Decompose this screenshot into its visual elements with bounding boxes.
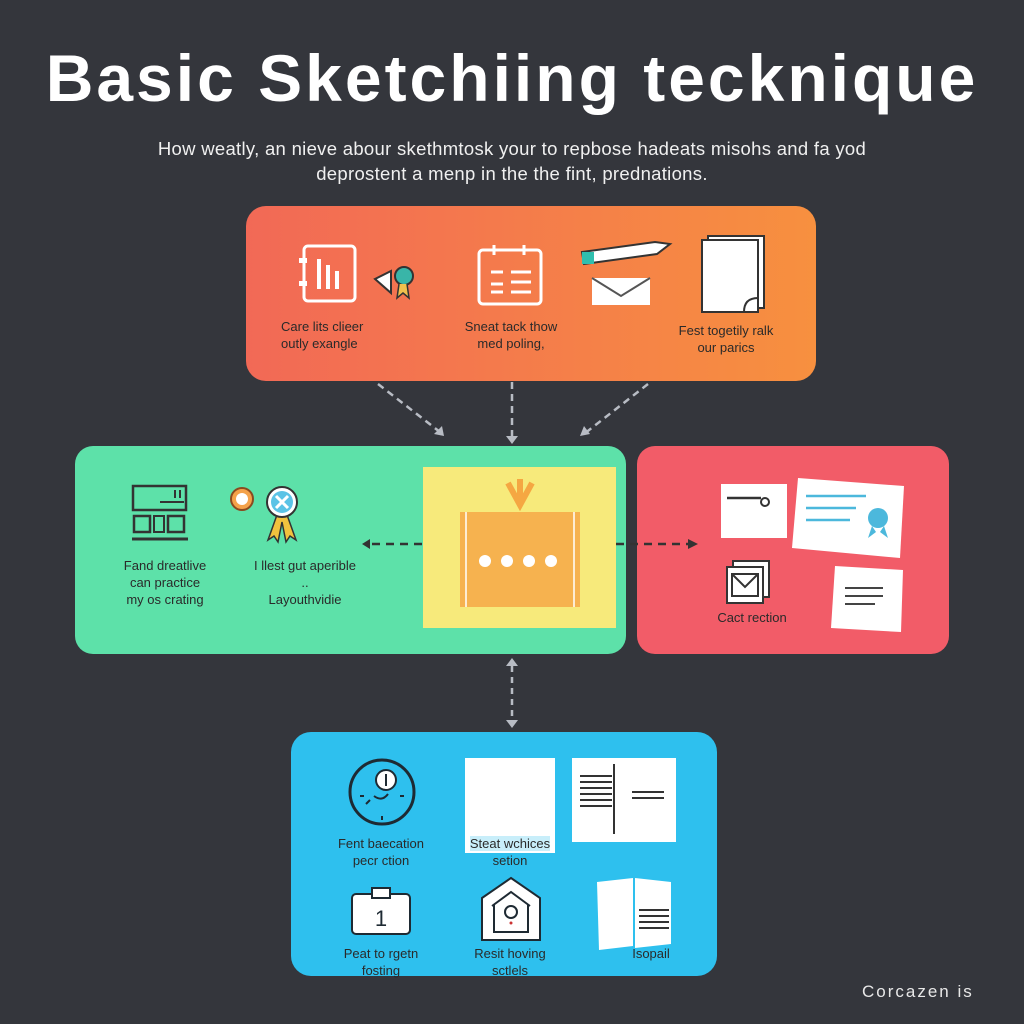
card: certificate [792,478,904,558]
text: blue 4: Peat to rgetn [344,946,418,961]
text: blue 2: Steat wchices [470,836,550,851]
arrow: right [616,539,698,549]
icon: clock globe [348,758,416,826]
icon: orange box with dots [460,479,580,607]
icon: paper stack [701,235,765,313]
text: green col1 [124,558,206,607]
panel: blue [291,732,717,976]
text: green col1: my os crating [126,592,204,607]
text: red: Cact rection [717,610,787,625]
text: blue 4 [344,946,418,978]
text: col2: med poling, [477,336,545,351]
text: green col2 [254,558,356,607]
text: green col2: Layouthvidie [268,592,342,607]
text: blue 2: setion [493,853,527,868]
panel: orange top [246,206,816,381]
icon: pen & envelope [580,241,672,305]
text: blue 6: Isopail [632,946,670,961]
card: blank [465,758,555,853]
icon: checklist [478,245,542,306]
text: green col1: can practice [130,575,200,590]
icon: chart notebook [299,244,414,302]
footer: Corcazen is [862,982,974,1001]
card: lines [831,566,903,632]
panel: red [637,446,949,654]
icon: layout [132,484,188,540]
text: col2 [465,319,558,351]
subtitle [158,138,866,184]
text: green col2: .. [301,575,309,590]
text: green col1: Fand dreatlive [124,558,206,573]
text: blue 1 [338,836,424,868]
arrows: top to center [377,382,649,444]
text: blue 4: fosting [362,963,400,978]
panel: green [75,446,626,654]
icon: calendar [351,887,411,935]
arrow: center to bottom [506,658,518,728]
icon: badge ribbon [230,486,298,544]
text: blue 1: Fent baecation [338,836,424,851]
text: col1 [281,319,364,351]
text: col4: our parics [697,340,755,355]
arrow: left [362,539,422,549]
text: blue 5: Resit hoving [474,946,546,961]
card: lines doc [572,758,676,842]
card: key [721,484,787,538]
subtitle: How weatly, an nieve abour skethmtosk your to repbose hadeats misohs and fa yod [158,138,866,159]
text: col4: Fest togetily ralk [679,323,773,338]
text: col2: Sneat tack thow [465,319,557,334]
text: green col2: I llest gut aperible [254,558,356,573]
icon: envelope stack [726,560,770,604]
text: col4 [679,323,774,355]
title: Basic Sketchiing tecknique [46,41,978,115]
icon: calendar: 1 [375,906,387,931]
icon: folded book [597,878,671,950]
icon: house [481,876,541,941]
text: blue 5 [474,946,546,978]
subtitle: deprostent a menp in the the fint, prednations. [316,163,708,184]
text: blue 1: pecr ction [353,853,409,868]
yellow card [423,467,616,628]
text: blue 2 [470,836,550,868]
text: col1: Care lits clieer [281,319,363,334]
text: col1: outly exangle [281,336,358,351]
text: blue 5: sctlels [492,963,528,978]
